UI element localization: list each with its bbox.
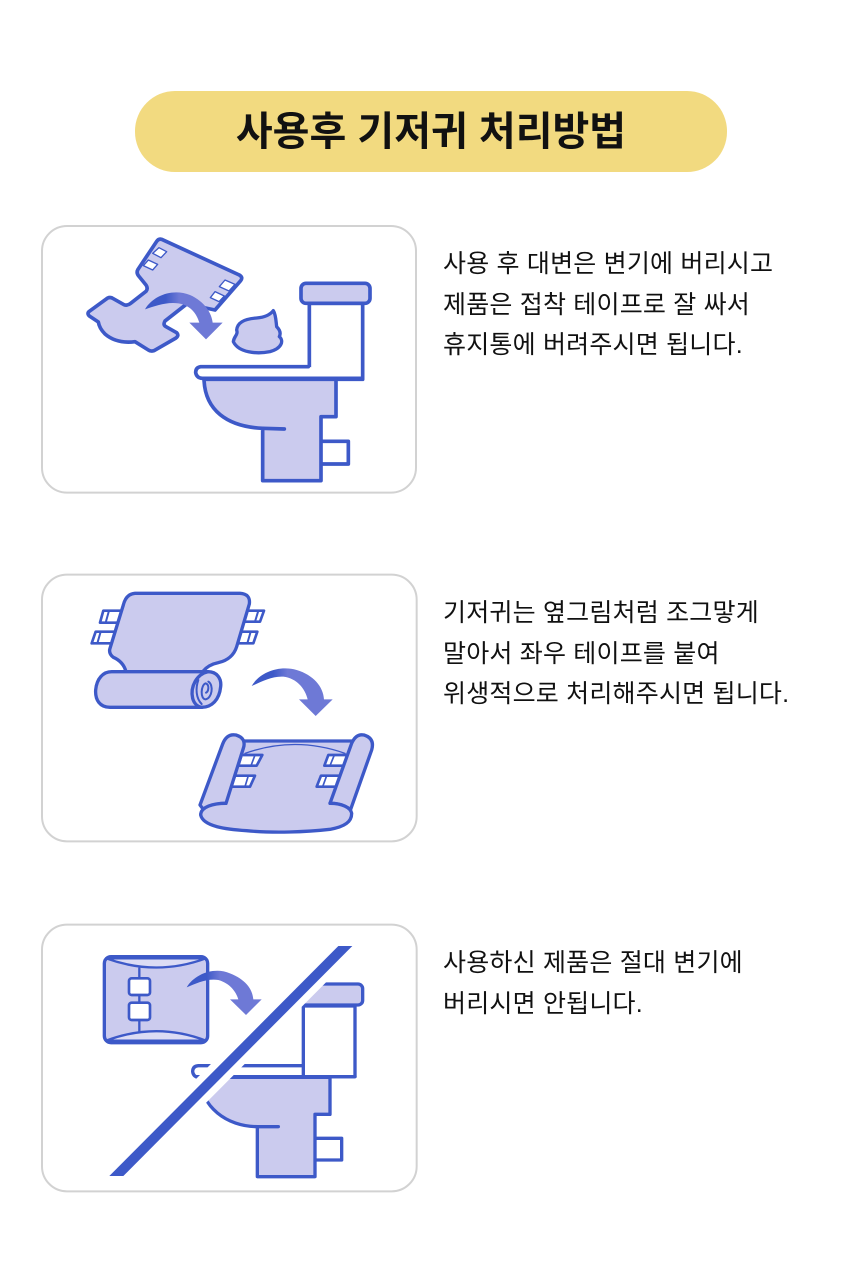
icon: curved arrow bbox=[145, 292, 223, 339]
text: step two: 기저귀는 옆그림처럼 조그맣게 bbox=[443, 599, 759, 627]
text: step two: 위생적으로 처리해주시면 됩니다. bbox=[443, 680, 789, 708]
text: step one: 사용 후 대변은 변기에 버리시고 bbox=[443, 250, 773, 278]
icon: rolled package bbox=[104, 957, 208, 1043]
text: step three bbox=[443, 949, 743, 1018]
panel: dispose waste in toilet bbox=[41, 225, 417, 494]
text: step three: 사용하신 제품은 절대 변기에 bbox=[443, 949, 743, 977]
text: step one bbox=[443, 250, 773, 359]
title text: 사용후 기저귀 처리방법 bbox=[236, 110, 626, 154]
text: step one: 제품은 접착 테이프로 잘 싸서 bbox=[443, 290, 750, 318]
icon: toilet bbox=[193, 984, 363, 1177]
icon: toilet bbox=[196, 283, 370, 481]
title banner bbox=[135, 91, 727, 172]
icon: taped diaper bbox=[200, 735, 372, 832]
text: step two bbox=[443, 599, 789, 708]
panel: do not flush bbox=[41, 924, 418, 1192]
text: step three: 버리시면 안됩니다. bbox=[443, 990, 643, 1018]
text: step one: 휴지통에 버려주시면 됩니다. bbox=[443, 331, 743, 359]
panel: roll up diaper bbox=[41, 574, 418, 842]
icon: curved arrow bbox=[252, 668, 333, 716]
icon: rolled diaper bbox=[92, 593, 264, 707]
icon: waste bbox=[233, 311, 282, 353]
icon: prohibition slash bbox=[109, 946, 352, 1176]
icon: curved arrow bbox=[187, 971, 262, 1015]
text: step two: 말아서 좌우 테이프를 붙여 bbox=[443, 640, 720, 668]
icon: diaper bbox=[88, 239, 242, 351]
